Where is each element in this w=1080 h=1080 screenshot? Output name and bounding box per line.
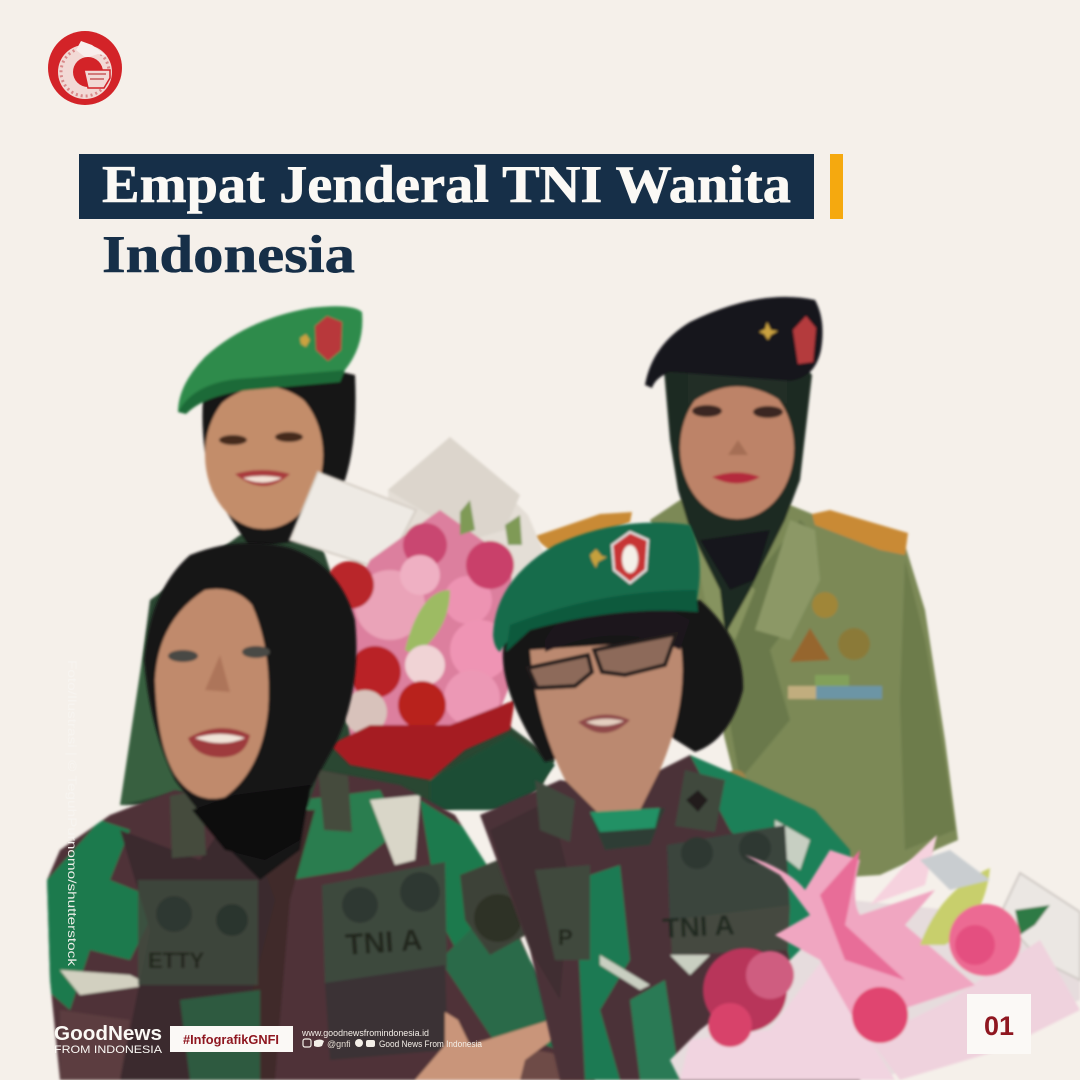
photo: general with green beret, upper left xyxy=(120,306,555,810)
page number badge: 01 xyxy=(984,1011,1014,1041)
badges xyxy=(812,592,838,618)
hijab xyxy=(202,360,356,548)
photo: general in camouflage with green beret, lower centre: P xyxy=(558,925,573,950)
face xyxy=(680,377,794,519)
black beret xyxy=(645,297,823,388)
green beret xyxy=(493,522,700,652)
footer: brand logotype: GoodNews xyxy=(54,1023,162,1045)
photo: general in camouflage with black hijab, lower left xyxy=(40,543,600,1080)
face xyxy=(155,589,269,799)
footer: website and social handles: @gnfi xyxy=(327,1039,351,1049)
hijab xyxy=(664,350,812,635)
face xyxy=(530,640,682,815)
footer: website and social handles: www.goodnewsfromindonesia.id xyxy=(301,1028,429,1038)
hand xyxy=(415,1012,565,1080)
footer: website and social handles: Good News From Indonesia xyxy=(379,1039,482,1049)
photo: general in camouflage with black hijab, lower left: ETTY xyxy=(148,948,205,973)
photo: bouquet with pink lilies, lower right xyxy=(670,835,1080,1080)
glasses xyxy=(528,655,592,688)
green beret xyxy=(178,306,362,412)
epaulettes xyxy=(533,512,632,552)
title xyxy=(79,154,843,284)
footer: hashtag xyxy=(170,1026,293,1052)
title: Indonesia xyxy=(102,226,355,284)
footer: hashtag: #InfografikGNFI xyxy=(183,1033,279,1047)
photo: general in camouflage with green beret, lower centre: TNI A xyxy=(662,909,735,944)
title: Empat Jenderal TNI Wanita xyxy=(102,156,791,214)
footer: website and social handles xyxy=(301,1028,482,1049)
footer: brand logotype: FROM INDONESIA xyxy=(54,1044,163,1056)
photo: bouquet in white wrapping, centre xyxy=(290,437,555,810)
photo: general in camouflage with green beret, lower centre xyxy=(470,522,870,1080)
photo: general in green dress uniform with black beret xyxy=(533,297,958,880)
page number badge xyxy=(967,994,1031,1054)
logo: GNFI round emblem xyxy=(48,31,122,105)
hair xyxy=(503,600,743,762)
footer: brand logotype xyxy=(54,1023,163,1056)
hijab xyxy=(144,543,356,880)
photo: general in camouflage with black hijab, lower left: TNI A xyxy=(344,924,424,962)
photo credit: Foto/Ilustrasi | © TeguhPurnomo/shutterstock xyxy=(65,660,79,967)
face xyxy=(205,381,323,529)
